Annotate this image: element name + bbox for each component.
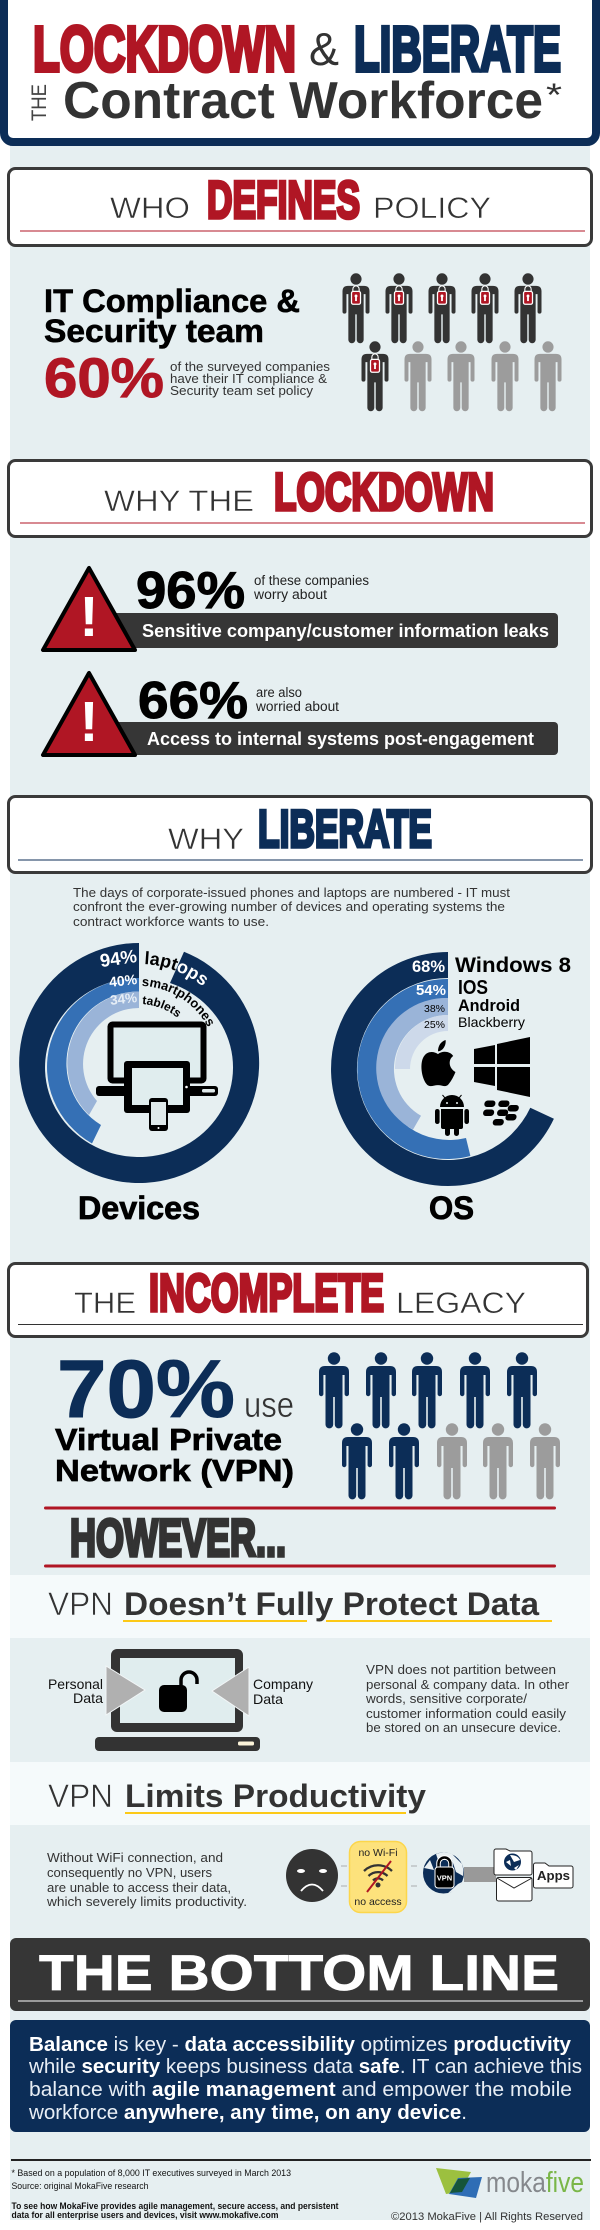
text block: 70 percent VPN: Network (VPN)	[55, 1453, 294, 1488]
text block: IT compliance	[44, 283, 330, 409]
icon: globe folder	[494, 1849, 532, 1875]
label: windows 8: Windows 8	[455, 954, 571, 977]
callout: 96 percent	[43, 562, 558, 650]
pictogram: 70 percent people	[319, 1352, 560, 1499]
title: asterisk: *	[546, 77, 562, 113]
icon: warning triangle	[43, 568, 135, 650]
panel: VPN doesn't fully protect data	[10, 1575, 590, 1638]
text block: productivity: Without WiFi connection, and	[47, 1850, 223, 1865]
pictogram: 60 percent people	[342, 273, 562, 411]
heading: the incomplete legacy: THE	[74, 1287, 136, 1320]
banner: the bottom line: THE BOTTOM LINE	[39, 1945, 559, 2001]
label: personal data: Personal	[48, 1676, 103, 1692]
logo: mokafive	[436, 2167, 584, 2199]
panel: VPN doesn't fully protect data: Doesn’t Fully Protect Data	[124, 1586, 539, 1622]
callout: 66 percent: worried about	[255, 699, 339, 714]
panel: conclusion: Balance is key - data accessibility optimizes productivity	[29, 2034, 572, 2056]
panel: conclusion: balance with agile management and empower the mobile	[29, 2079, 572, 2101]
icon: VPN globe lock	[423, 1852, 464, 1894]
label: 34 percent: 34%	[109, 990, 138, 1008]
heading: however	[44, 1506, 556, 1568]
text block: productivity: consequently no VPN, users	[47, 1865, 212, 1880]
panel: VPN limits productivity	[10, 1762, 590, 1825]
icon: laptop with open lock	[95, 1649, 260, 1751]
label: 38 percent: 38%	[424, 1003, 445, 1015]
title: contract workforce: Contract Workforce	[63, 72, 543, 130]
icon: warning triangle: !	[80, 585, 98, 649]
icon: blackberry	[483, 1100, 519, 1126]
icon: no wi-fi card: no Wi-Fi	[358, 1847, 398, 1859]
text block: 70 percent VPN: use	[244, 1384, 294, 1425]
heading: however: HOWEVER...	[70, 1509, 286, 1568]
stat description: Security team set policy	[170, 384, 314, 398]
text block: intro: confront the ever-growing number of devices and operating systems the	[73, 899, 505, 914]
heading: who defines policy	[8, 168, 592, 246]
callout: 96 percent: of these companies	[254, 573, 369, 588]
text block: 70 percent VPN: 70%	[57, 1344, 235, 1435]
text block: VPN partition: personal & company data. In other	[366, 1677, 570, 1692]
text block: VPN partition: words, sensitive corporate/	[365, 1691, 527, 1706]
logo: mokafive: mokafive	[486, 2167, 584, 2199]
callout: 96 percent: 96%	[136, 562, 245, 620]
footnotes	[12, 2168, 339, 2221]
icon: warning triangle	[43, 673, 135, 755]
label: 25 percent: 25%	[424, 1019, 445, 1031]
callout: 66 percent: Access to internal systems post-engagement	[147, 729, 534, 749]
text block: intro	[73, 885, 510, 929]
label: company data	[253, 1676, 313, 1707]
heading: why liberate: LIBERATE	[258, 800, 432, 859]
chart: devices	[19, 943, 260, 1226]
banner: the bottom line	[10, 1938, 590, 2011]
stat description: have their IT compliance &	[170, 372, 328, 386]
label: 68 percent: 68%	[412, 958, 445, 976]
heading: who defines policy: WHO	[110, 192, 190, 225]
title banner	[4, 0, 596, 142]
text block: 70 percent VPN: Virtual Private	[55, 1422, 282, 1457]
icon: sad face	[286, 1849, 338, 1902]
panel: VPN limits productivity: Limits Productivity	[125, 1778, 426, 1814]
footer rule	[11, 2159, 591, 2161]
text block: productivity	[46, 1850, 247, 1909]
label: 40 percent: 40%	[108, 971, 138, 990]
heading: why the lockdown: LOCKDOWN	[274, 463, 494, 522]
label: devices: Devices	[78, 1190, 200, 1226]
label: android: Android	[458, 997, 520, 1015]
text block: VPN partition: customer information could easily	[366, 1706, 567, 1721]
footnotes: Source: original MokaFive research	[12, 2181, 148, 2192]
footnotes: * Based on a population of 8,000 IT executives surveyed in March 2013	[12, 2168, 291, 2179]
callout: 66 percent: 66%	[138, 672, 248, 730]
label: blackberry: Blackberry	[458, 1014, 525, 1030]
heading: why liberate: WHY	[168, 823, 244, 856]
label: 54 percent: 54%	[416, 982, 446, 999]
icon: devices	[96, 1024, 218, 1131]
icon: windows	[474, 1037, 530, 1097]
label: personal data	[48, 1676, 103, 1706]
footnotes: To see how MokaFive provides agile management, secure access, and persistent	[12, 2201, 339, 2212]
label: OS: OS	[429, 1190, 474, 1226]
text block: productivity: are unable to access their data,	[47, 1880, 231, 1895]
panel: conclusion: workforce anywhere, any time, on any device .	[28, 2102, 467, 2124]
stat description: of the surveyed companies	[170, 360, 330, 374]
callout: 96 percent: Sensitive company/customer information leaks	[142, 621, 549, 641]
stat: 60 percent: 60%	[44, 346, 164, 409]
stat description	[170, 360, 330, 398]
heading: why the lockdown	[8, 460, 592, 536]
text block: intro: contract workforce wants to use.	[73, 914, 269, 929]
label: company data: Data	[253, 1691, 283, 1707]
label: smartphones: smartphones	[142, 979, 213, 1026]
text block: VPN partition: VPN does not partition between	[366, 1662, 556, 1677]
text block: VPN partition: be stored on an unsecure device.	[366, 1720, 561, 1735]
text block: productivity: which severely limits productivity.	[46, 1894, 247, 1909]
chart: OS	[331, 952, 571, 1226]
callout: 66 percent	[43, 672, 558, 755]
title: lockdown: LOCKDOWN	[33, 13, 296, 85]
icon: no wi-fi card: no access	[354, 1896, 402, 1908]
connector bar	[464, 1867, 496, 1882]
heading: who defines policy: POLICY	[373, 192, 491, 225]
heading: the incomplete legacy	[8, 1264, 588, 1336]
panel: VPN limits productivity: VPN	[48, 1778, 113, 1814]
text block: intro: The days of corporate-issued phones and laptops are numbered - IT must	[73, 885, 510, 900]
label: 94 percent: 94%	[98, 945, 138, 971]
text block: IT compliance: IT Compliance &	[44, 283, 300, 319]
heading: why the lockdown: WHY THE	[104, 485, 254, 518]
label: tablets: tablets	[142, 996, 180, 1017]
text block: 70 percent VPN	[55, 1344, 294, 1488]
text block: VPN partition	[365, 1662, 570, 1735]
copyright: ©2013 MokaFive | All Rights Reserved	[391, 2211, 583, 2223]
footnotes: data for all enterprise users and devices, visit www.mokafive.com	[12, 2210, 278, 2221]
title: ampersand: &	[309, 23, 339, 75]
icon: apps folder	[534, 1863, 573, 1888]
icon: no wi-fi card	[350, 1842, 406, 1912]
text block: IT compliance: Security team	[44, 313, 264, 349]
label: laptops: laptops	[145, 951, 207, 985]
icon: apps folder: Apps	[537, 1868, 570, 1883]
label: IOS: IOS	[458, 977, 488, 999]
heading: the incomplete legacy: INCOMPLETE	[149, 1264, 384, 1323]
dashed connectors	[341, 1866, 421, 1886]
label: company data: Company	[253, 1676, 313, 1692]
panel: conclusion: while security keeps business data safe. IT can achieve this	[28, 2056, 582, 2078]
icon: android	[435, 1095, 469, 1136]
heading: why liberate	[8, 796, 592, 872]
callout: 96 percent: worry about	[253, 587, 327, 602]
label: personal data: Data	[73, 1690, 103, 1706]
panel: conclusion	[10, 2020, 590, 2132]
panel: VPN doesn't fully protect data: VPN	[48, 1586, 113, 1622]
icon: apple	[421, 1040, 455, 1086]
heading: who defines policy: DEFINES	[207, 171, 360, 230]
icon: warning triangle: !	[80, 690, 98, 754]
heading: the incomplete legacy: LEGACY	[396, 1287, 526, 1320]
icon: envelope	[496, 1878, 532, 1901]
title: the: THE	[28, 84, 51, 121]
callout: 66 percent: are also	[256, 685, 302, 700]
icon: VPN globe lock: VPN	[437, 1874, 452, 1882]
